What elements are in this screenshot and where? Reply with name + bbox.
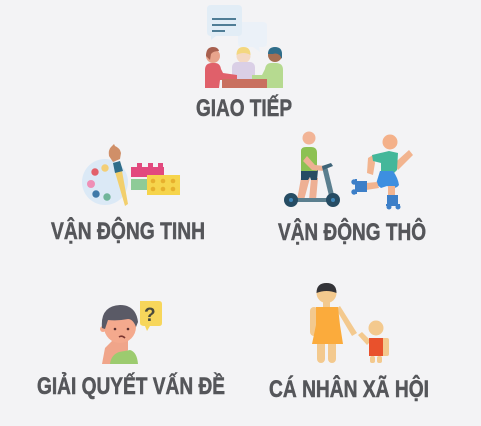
panel: giao tiếp	[196, 5, 292, 122]
heading: cá nhân xã hội: CÁ NHÂN XÃ HỘI	[269, 375, 429, 403]
icon: palette and blocks	[82, 144, 180, 206]
panel: vận động tinh	[51, 144, 205, 245]
icon: thinking child with question mark: ?	[144, 305, 156, 326]
icon: people talking	[205, 5, 283, 88]
heading: giao tiếp: GIAO TIẾP	[196, 94, 292, 122]
heading: vận động tinh: VẬN ĐỘNG TINH	[51, 217, 205, 245]
icon: thinking child with question mark	[100, 301, 162, 364]
heading: giải quyết vấn đề: GIẢI QUYẾT VẤN ĐỀ	[37, 371, 225, 400]
panel: cá nhân xã hội	[269, 283, 429, 403]
panel: vận động thô	[278, 132, 426, 246]
panel: giải quyết vấn đề	[37, 301, 225, 400]
heading: vận động thô: VẬN ĐỘNG THÔ	[278, 218, 426, 246]
icon: mother and child holding hands	[310, 283, 389, 363]
icon: child on scooter and child skating	[284, 132, 413, 210]
